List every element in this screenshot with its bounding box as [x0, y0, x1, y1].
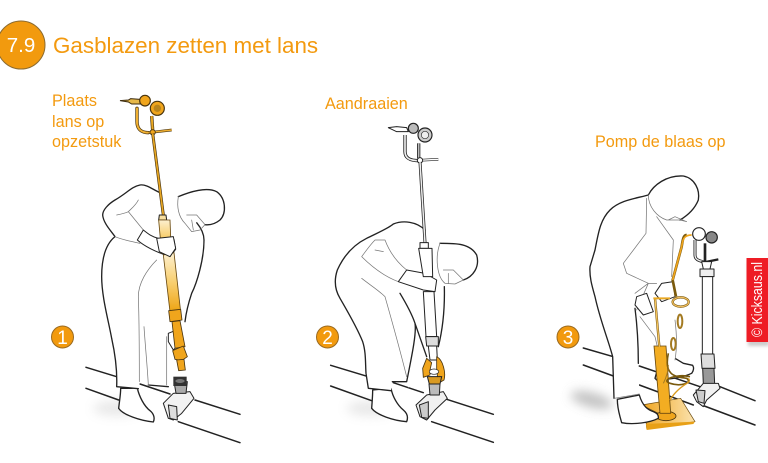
illustration: step 1 worker placing lance [86, 95, 240, 443]
step 1 number: 1 [57, 328, 68, 349]
step 1 label: lans op [52, 113, 104, 131]
illustration: step 2 worker tightening [331, 123, 493, 442]
lance with gauges [693, 228, 720, 407]
step 3 label: Pomp de blaas op [595, 133, 726, 151]
pipe and shadow [569, 348, 755, 425]
watermark tab: © Kicksaus.nl [750, 262, 766, 337]
step 1 label: Plaats [52, 92, 97, 110]
step 1 number [52, 326, 74, 349]
step 2 number: 2 [322, 328, 333, 349]
title: Gasblazen zetten met lans [53, 33, 318, 58]
pipe and shadow [331, 365, 493, 442]
lance [120, 95, 187, 371]
hands on nut [423, 357, 445, 384]
worker [590, 176, 699, 398]
gas bubble fitting on saddle [163, 377, 194, 420]
worker [335, 222, 478, 422]
fitting on saddle [416, 384, 447, 420]
foot pump with hose [642, 235, 695, 430]
boot on pump plate [617, 395, 658, 424]
step 2 number [316, 326, 338, 349]
pipe and shadow [86, 367, 240, 443]
lance [388, 123, 438, 360]
section number badge [0, 21, 45, 69]
illustration: step 3 worker pumping [569, 176, 755, 430]
hand on lance [157, 237, 176, 257]
section number badge: 7.9 [7, 34, 35, 57]
watermark tab [746, 258, 768, 346]
step 1 label: opzetstuk [52, 133, 122, 151]
step 2 label: Aandraaien [325, 95, 408, 113]
worker [102, 185, 224, 422]
step 3 number [557, 326, 579, 349]
step 3 number: 3 [563, 328, 573, 349]
